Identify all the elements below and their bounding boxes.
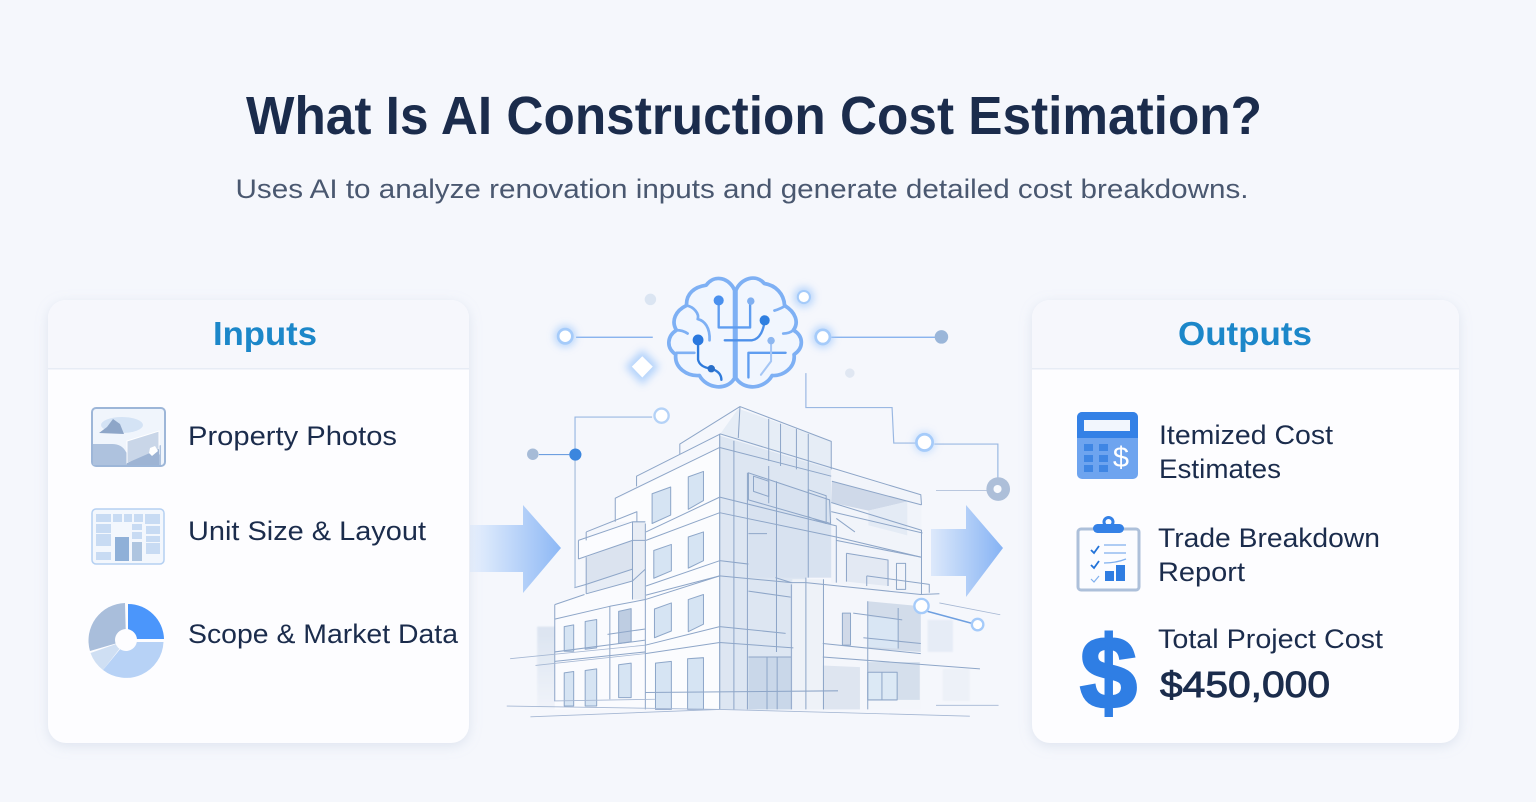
label: total project cost: Total Project Cost xyxy=(1158,624,1384,654)
icon: AI brain xyxy=(669,278,801,387)
inputs heading: Inputs xyxy=(213,315,317,352)
outputs header band xyxy=(1032,368,1459,370)
icon: pie chart xyxy=(88,603,164,678)
subtitle: Uses AI to analyze renovation inputs and generate detailed cost breakdowns. xyxy=(236,174,1248,204)
icon: unit layout xyxy=(92,509,164,564)
label: trade breakdown report: Trade Breakdown xyxy=(1158,523,1380,553)
icon: calculator xyxy=(1077,412,1138,479)
label: scope and market data: Scope & Market Data xyxy=(188,619,459,649)
panel: inputs xyxy=(48,300,469,743)
label: trade breakdown report: Report xyxy=(1158,557,1246,587)
structure lines xyxy=(555,407,980,709)
label: property photos: Property Photos xyxy=(188,421,397,451)
label: unit size and layout: Unit Size & Layout xyxy=(188,516,427,546)
label: itemized cost estimates: Itemized Cost xyxy=(1159,420,1334,450)
ground lines xyxy=(507,490,1000,717)
panel: outputs xyxy=(1032,300,1459,743)
icon: dollar sign: $ xyxy=(1080,616,1137,730)
building faces xyxy=(720,409,831,469)
icon: calculator: $ xyxy=(1113,442,1129,474)
circuit nodes xyxy=(527,287,1010,630)
icon: clipboard report xyxy=(1078,518,1139,590)
inputs header band xyxy=(48,368,469,370)
illustration: brain and building xyxy=(507,278,1010,717)
ground fades xyxy=(537,627,563,708)
label: itemized cost estimates: Estimates xyxy=(1159,454,1281,484)
arrow: inputs to building xyxy=(470,505,561,593)
circuit connectors xyxy=(539,337,998,623)
title: What Is AI Construction Cost Estimation? xyxy=(246,86,1262,146)
windows xyxy=(564,471,851,709)
building xyxy=(507,407,1000,717)
value: total project cost: $450,000 xyxy=(1160,664,1330,705)
icon: property photo xyxy=(92,408,165,466)
outputs heading: Outputs xyxy=(1178,315,1312,352)
arrow: building to outputs xyxy=(931,505,1003,597)
